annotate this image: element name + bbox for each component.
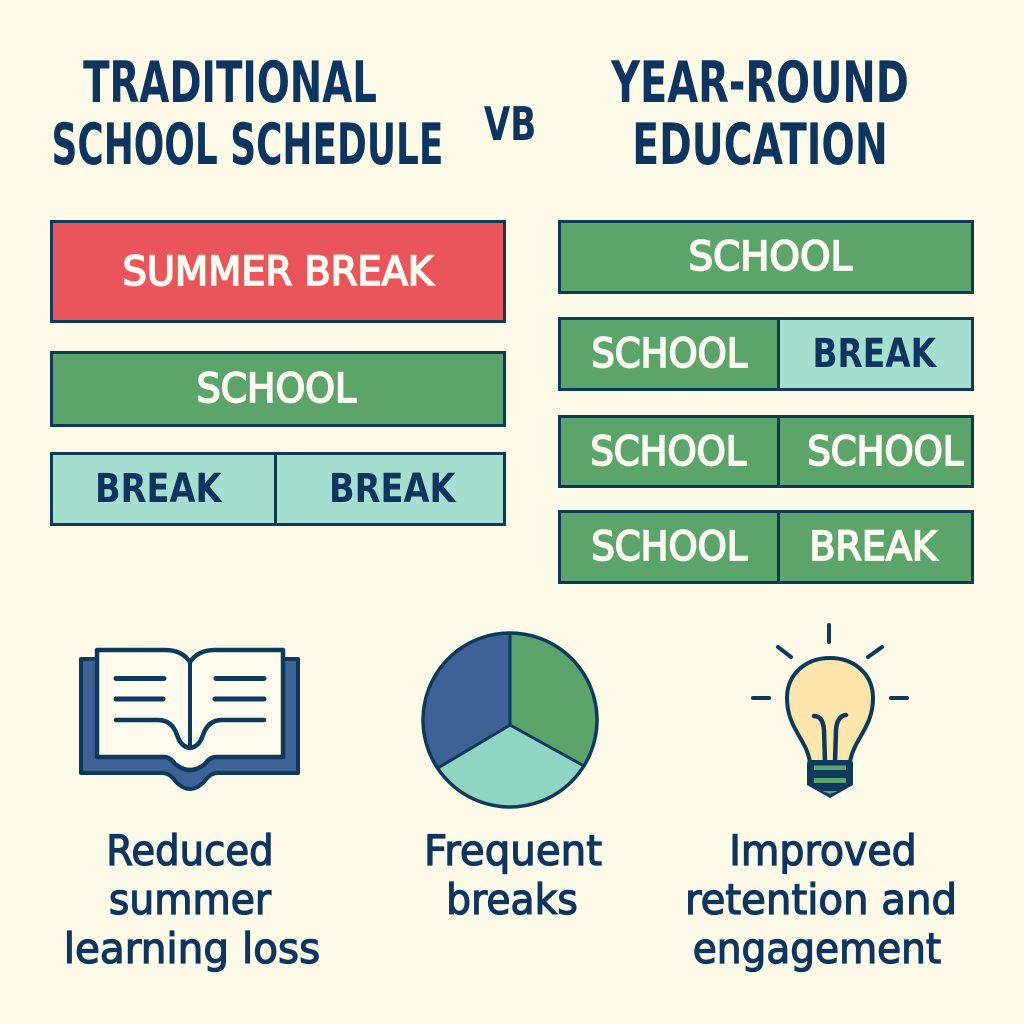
caption: frequent breaks: breaks [446,875,578,924]
bar: break and break: BREAK [95,466,222,512]
title: year-round education [610,50,909,178]
bar: school and break: BREAK [810,524,937,570]
panel: year-round schedule bars [558,220,974,584]
caption: reduced summer learning loss [64,826,320,973]
bar: school [50,351,506,427]
bar: school and school: SCHOOL [590,428,746,474]
caption: reduced summer learning loss: Reduced [106,826,274,875]
title: traditional school schedule: SCHOOL SCHEDULE [52,112,443,178]
bar: school and school: SCHOOL [807,428,964,474]
versus label: VB [484,97,536,151]
icon: open book [79,648,300,791]
bar: break and break [50,452,506,526]
bar: summer break [50,220,506,323]
caption: improved retention and engagement [685,826,957,973]
caption: reduced summer learning loss: learning loss [64,924,320,973]
title: traditional school schedule [52,50,443,178]
bar: school and break: SCHOOL [591,331,747,377]
caption: improved retention and engagement: engagement [693,924,941,973]
bar: school: SCHOOL [196,366,356,412]
caption: frequent breaks [424,826,602,924]
bar: school [558,220,974,294]
bar: summer break: SUMMER BREAK [123,248,433,294]
title: traditional school schedule: TRADITIONAL [83,50,377,116]
panel: traditional schedule bars [50,220,506,526]
bar: school and break: BREAK [813,331,936,377]
icon: light bulb [751,623,909,798]
caption: improved retention and engagement: retention and [685,875,957,924]
title: year-round education: YEAR-ROUND [611,50,909,116]
caption: reduced summer learning loss: summer [109,875,271,924]
bar: school and break [558,317,974,391]
caption: improved retention and engagement: Improved [729,826,917,875]
bar: school and break: SCHOOL [591,524,747,570]
bar: school and break [558,510,974,584]
caption: frequent breaks: Frequent [424,826,602,875]
icon: pie chart [421,631,599,809]
title: year-round education: EDUCATION [632,112,888,178]
bar: break and break: BREAK [329,466,455,512]
bar: school and school [558,415,974,488]
bar: school: SCHOOL [688,234,852,280]
